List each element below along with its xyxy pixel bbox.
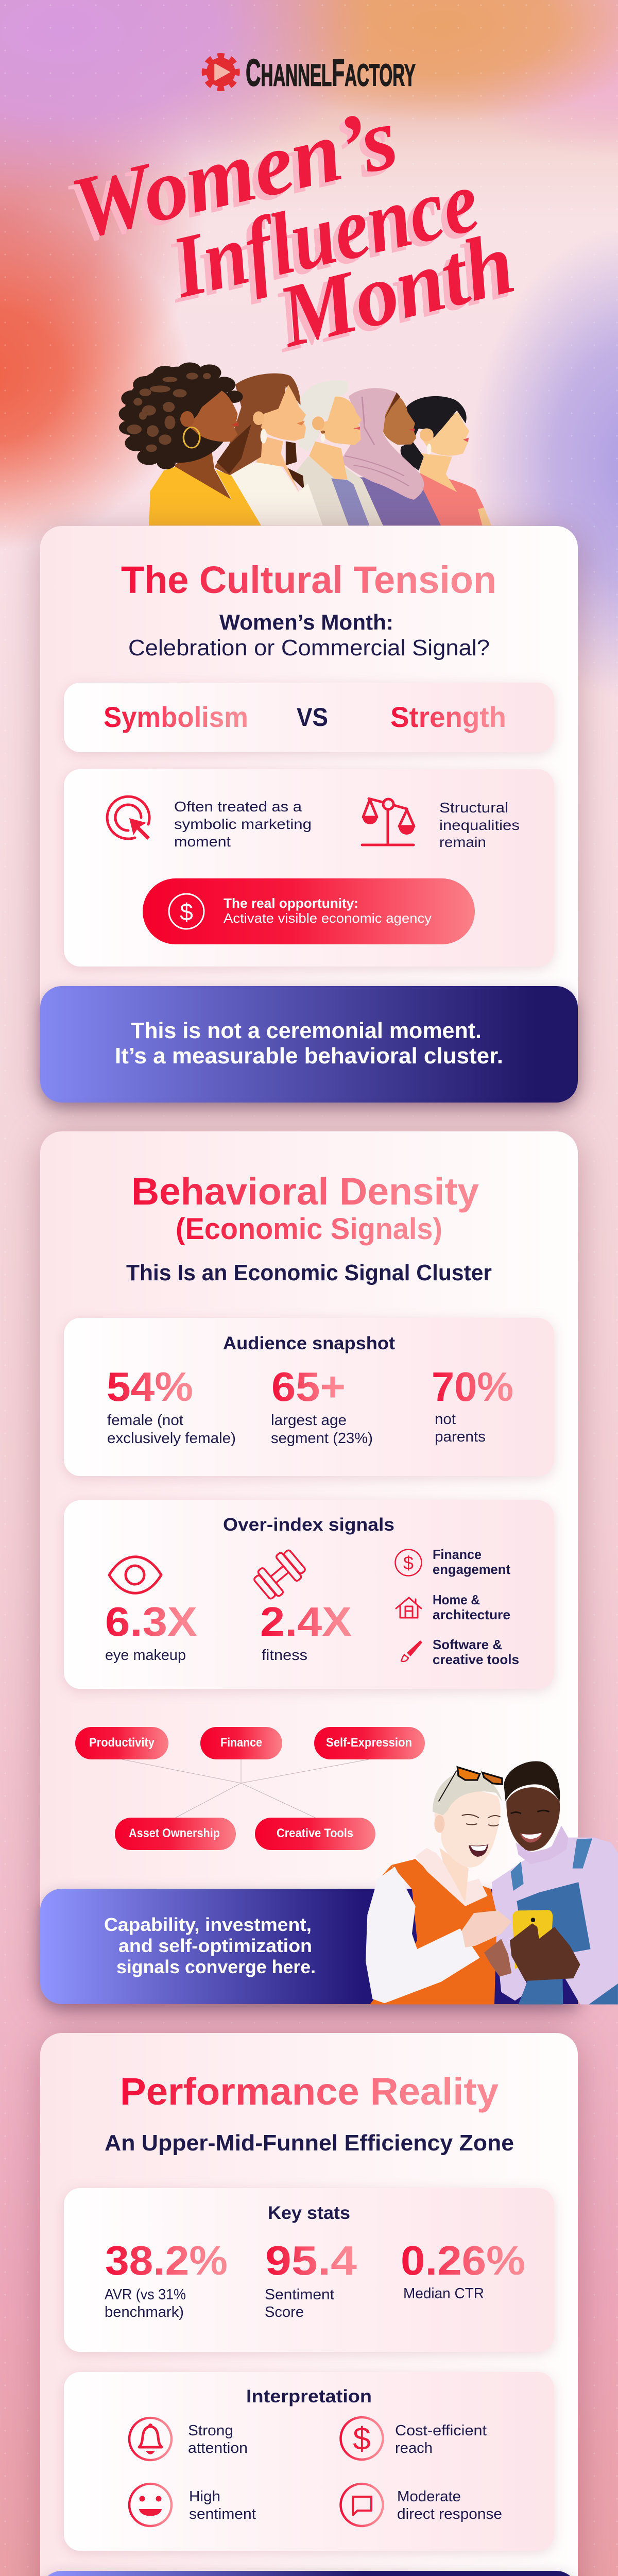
panel: over-index signals: Over-index signals bbox=[223, 1515, 394, 1535]
panel: Performance Reality bbox=[40, 2033, 578, 2576]
woman four in hijab bbox=[341, 388, 441, 526]
stat: 2.4X fitness: fitness bbox=[262, 1647, 307, 1664]
logo: Channel Factory bbox=[204, 52, 416, 94]
callout: the real opportunity: Activate visible economic agency bbox=[224, 910, 432, 926]
title: Women's Influence Month: Month bbox=[268, 214, 523, 366]
item: moderate direct response: Moderate bbox=[397, 2488, 461, 2505]
comparison row: symbolism vs strength bbox=[64, 683, 554, 752]
woman five bbox=[401, 396, 491, 526]
subheading bbox=[128, 610, 490, 660]
card background bbox=[40, 2033, 578, 2576]
title: Women's Influence Month: Women’s bbox=[63, 89, 406, 258]
pill: Creative Tools bbox=[255, 1818, 375, 1850]
title: Women's Influence Month bbox=[63, 89, 523, 366]
banner: optimized for attention bbox=[40, 2571, 578, 2576]
logo: Channel Factory: CHANNELFACTORY bbox=[246, 52, 416, 94]
heading: (Economic Signals) bbox=[176, 1212, 442, 1246]
stat: 65+: segment (23%) bbox=[271, 1430, 373, 1447]
stat: 6.3X eye makeup bbox=[105, 1599, 197, 1664]
icon: eye bbox=[109, 1557, 161, 1593]
banner: signals converge: and self-optimization bbox=[118, 1935, 312, 1956]
panel: interpretation bbox=[64, 2372, 554, 2551]
stat: 65+ bbox=[271, 1364, 373, 1447]
panel: over-index signals bbox=[64, 1500, 554, 1689]
item: moderate direct response: direct response bbox=[397, 2506, 502, 2522]
stat: 95.4 bbox=[265, 2238, 357, 2320]
signal: software and creative tools: creative tools bbox=[433, 1652, 519, 1667]
text: symbolic marketing moment bbox=[174, 799, 312, 850]
signal: home and architecture: Home & bbox=[433, 1592, 480, 1607]
pill: Productivity bbox=[75, 1727, 168, 1759]
text: structural inequalities remain: Structural bbox=[439, 800, 508, 816]
stat: 70% bbox=[432, 1364, 513, 1445]
stat: 38.2% bbox=[105, 2238, 228, 2320]
stat: 54%: exclusively female) bbox=[107, 1430, 236, 1447]
woman one with curly hair and yellow top bbox=[119, 362, 261, 526]
comparison row: symbolism vs strength: VS bbox=[297, 703, 328, 732]
item: cost-efficient reach bbox=[341, 2417, 487, 2460]
card background bbox=[40, 1131, 578, 2004]
text: structural inequalities remain: inequalities bbox=[439, 817, 520, 833]
signal: home and architecture bbox=[396, 1592, 510, 1622]
stat: 70%: not bbox=[435, 1411, 456, 1428]
stat: 54%: female (not bbox=[107, 1412, 183, 1429]
pill: Self-Expression bbox=[314, 1727, 425, 1759]
item: cost-efficient reach: Cost-efficient bbox=[395, 2422, 487, 2439]
banner: signals converge: Capability, investment, bbox=[104, 1914, 312, 1935]
photo: two women looking at a yellow phone bbox=[366, 1761, 618, 2005]
item: strong attention: attention bbox=[188, 2440, 248, 2456]
signal: software and creative tools bbox=[401, 1637, 519, 1667]
left woman bbox=[366, 1767, 502, 2005]
banner: signals converge: signals converge here. bbox=[116, 1956, 316, 1977]
icon: dumbbell bbox=[251, 1547, 308, 1602]
panel: Behavioral Density bbox=[0, 1131, 618, 2576]
item: strong attention bbox=[129, 2418, 248, 2460]
icon: balance scales bbox=[362, 799, 415, 845]
stat: 65+: 65+ bbox=[271, 1364, 346, 1410]
callout: the real opportunity: The real opportunity: bbox=[224, 895, 358, 911]
stat: 38.2%: 38.2% bbox=[105, 2238, 228, 2283]
sunglasses bbox=[439, 1767, 502, 1802]
banner: not a ceremonial moment: It’s a measurable behavioral cluster. bbox=[115, 1043, 503, 1069]
item: cost-efficient reach: reach bbox=[395, 2440, 433, 2456]
stat: 38.2%: benchmark) bbox=[105, 2304, 184, 2320]
stat: 0.26%: 0.26% bbox=[401, 2238, 525, 2283]
text: symbolic marketing moment: Often treated as a bbox=[174, 799, 302, 815]
subheading: Women’s Month: bbox=[219, 610, 393, 634]
item: high sentiment: sentiment bbox=[189, 2506, 256, 2522]
stat: 0.26%: Median CTR bbox=[403, 2285, 484, 2302]
heading: Performance Reality bbox=[120, 2070, 499, 2113]
stat: 6.3X eye makeup: eye makeup bbox=[105, 1647, 186, 1664]
right woman bbox=[492, 1761, 618, 2005]
panel: interpretation: Interpretation bbox=[246, 2386, 372, 2406]
stat: 54%: 54% bbox=[107, 1364, 193, 1410]
diagram: convergence lines between pills bbox=[122, 1759, 369, 1818]
pill: Finance bbox=[200, 1727, 282, 1759]
text: symbolic marketing moment: symbolic marketing bbox=[174, 816, 312, 832]
pill: Self-Expression: Self-Expression bbox=[326, 1736, 412, 1750]
stat: 38.2%: AVR (vs 31% bbox=[105, 2286, 186, 2303]
stat: 95.4: Score bbox=[265, 2304, 304, 2320]
icon: gear with play triangle bbox=[204, 56, 237, 89]
heading: The Cultural Tension bbox=[121, 558, 496, 601]
heading: Behavioral Density bbox=[131, 1170, 479, 1213]
signal: software and creative tools: Software & bbox=[433, 1637, 502, 1652]
pill: Creative Tools: Creative Tools bbox=[277, 1826, 353, 1840]
illustration: five women in profile bbox=[119, 362, 491, 526]
text: structural inequalities remain: remain bbox=[439, 834, 486, 850]
banner: signals converge bbox=[40, 1889, 578, 2004]
text: structural inequalities remain bbox=[439, 800, 520, 850]
item: moderate direct response bbox=[341, 2484, 502, 2526]
stat: 95.4: 95.4 bbox=[265, 2238, 357, 2283]
subheading: Celebration or Commercial Signal? bbox=[128, 635, 490, 660]
stat: 2.4X fitness bbox=[260, 1599, 352, 1664]
stat: 2.4X fitness: 2.4X bbox=[260, 1599, 352, 1645]
icon: target with cursor bbox=[107, 796, 150, 840]
stat: 54% bbox=[107, 1364, 236, 1447]
comparison row: symbolism vs strength: Strength bbox=[390, 701, 506, 733]
stat: 6.3X eye makeup: 6.3X bbox=[105, 1599, 197, 1645]
stat: 65+: largest age bbox=[271, 1412, 347, 1429]
woman three with white hair bbox=[297, 381, 383, 526]
panel: audience snapshot bbox=[64, 1318, 554, 1476]
panel: The Cultural Tension bbox=[40, 526, 578, 1103]
pill: Productivity: Productivity bbox=[89, 1736, 155, 1750]
item: strong attention: Strong bbox=[188, 2422, 233, 2439]
signal: finance engagement bbox=[396, 1547, 510, 1577]
banner: not a ceremonial moment bbox=[40, 986, 578, 1103]
stat: 0.26% bbox=[401, 2238, 525, 2302]
panel: audience snapshot: Audience snapshot bbox=[223, 1333, 395, 1353]
panel: key stats: Key stats bbox=[268, 2203, 350, 2223]
signal: finance engagement: $ bbox=[403, 1552, 414, 1573]
banner: not a ceremonial moment: This is not a ceremonial moment. bbox=[131, 1018, 482, 1043]
panel: key stats bbox=[64, 2188, 554, 2352]
pill: Asset Ownership: Asset Ownership bbox=[129, 1826, 220, 1840]
title: Women's Influence Month: Influence bbox=[163, 151, 487, 317]
signal: finance engagement: engagement bbox=[433, 1562, 510, 1577]
stat: 95.4: Sentiment bbox=[265, 2286, 334, 2303]
comparison row: symbolism vs strength: Symbolism bbox=[104, 701, 248, 733]
pill: Finance: Finance bbox=[220, 1736, 262, 1750]
text: symbolic marketing moment: moment bbox=[174, 834, 231, 850]
callout: the real opportunity bbox=[143, 878, 475, 944]
heading bbox=[131, 1170, 479, 1246]
signal: finance engagement: Finance bbox=[433, 1547, 482, 1562]
woman two with long brown hair bbox=[214, 374, 323, 526]
stat: 70%: 70% bbox=[432, 1364, 513, 1410]
subheading: This Is an Economic Signal Cluster bbox=[126, 1260, 492, 1285]
panel: framing notes bbox=[64, 769, 554, 967]
signal: home and architecture: architecture bbox=[433, 1607, 510, 1622]
pill: Asset Ownership bbox=[115, 1818, 236, 1850]
card background bbox=[40, 526, 578, 1103]
item: high sentiment bbox=[129, 2484, 256, 2526]
item: high sentiment: High bbox=[189, 2488, 220, 2505]
callout: the real opportunity: $ bbox=[180, 899, 193, 925]
item: cost-efficient reach: $ bbox=[353, 2421, 371, 2457]
hands and phone bbox=[462, 1910, 580, 1981]
subheading: An Upper-Mid-Funnel Efficiency Zone bbox=[105, 2130, 514, 2156]
stat: 70%: parents bbox=[435, 1429, 486, 1445]
